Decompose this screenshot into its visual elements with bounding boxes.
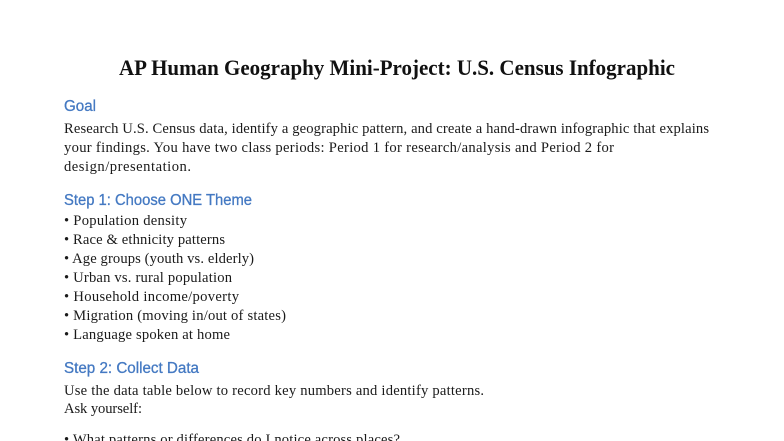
list: themes: • Household income/poverty <box>64 289 240 305</box>
text block: goal description: design/presentation. <box>64 159 191 175</box>
heading: step 2: Step 2: Collect Data <box>64 360 199 377</box>
text block: step 2 instructions: Ask yourself: <box>64 401 142 417</box>
list: themes: • Race & ethnicity patterns <box>64 232 225 248</box>
text block: goal description <box>64 121 709 175</box>
text block: goal description: your findings. You have two class periods: Period 1 for research/analysis and Period 2 for <box>64 140 614 156</box>
text block: step 2 instructions <box>64 383 484 441</box>
list: themes <box>64 213 286 343</box>
list: themes: • Language spoken at home <box>64 327 230 343</box>
list: themes: • Urban vs. rural population <box>64 270 233 286</box>
heading: step 1: Step 1: Choose ONE Theme <box>64 192 252 209</box>
text block: step 2 instructions: Use the data table below to record key numbers and identify patterns. <box>64 383 484 399</box>
text block: goal description: Research U.S. Census data, identify a geographic pattern, and create a hand-drawn infographic that explains <box>64 121 709 137</box>
heading: goal: Goal <box>64 98 96 115</box>
list: themes: • Age groups (youth vs. elderly) <box>64 251 254 267</box>
list: themes: • Migration (moving in/out of states) <box>64 308 286 324</box>
title: AP Human Geography Mini-Project: U.S. Census Infographic <box>119 55 675 80</box>
list: themes: • Population density <box>64 213 188 229</box>
